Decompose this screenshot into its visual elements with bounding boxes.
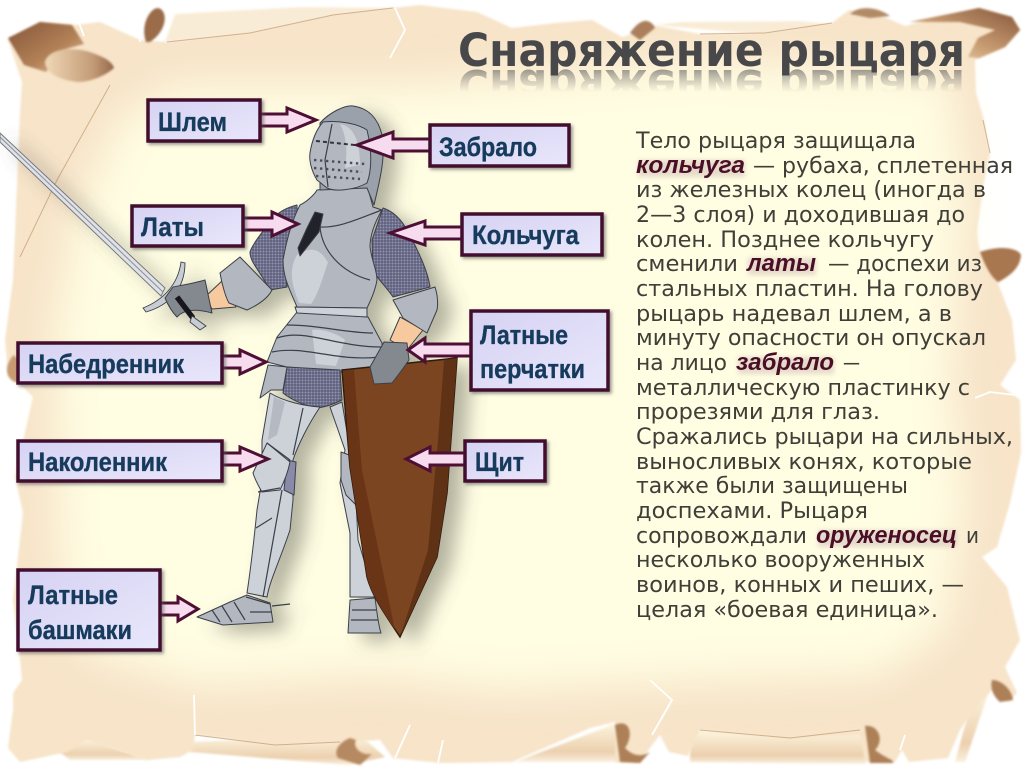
label: plate armour [132,206,243,246]
label: gauntlets: Латные [480,320,568,350]
label: visor: Забрало [439,132,537,162]
label: knee guard: Наколенник [28,447,167,477]
body text [635,128,1013,623]
body text: прорезями для глаз. [636,399,880,425]
body text: Тело рыцаря защищала [635,128,916,154]
curl: top left [8,8,165,82]
body text: также были защищены [636,473,908,499]
body text: и [966,523,979,549]
arrow: shield [406,447,466,471]
arrow: cuisse [220,350,266,374]
sword [0,133,185,312]
label: visor [430,125,569,166]
label: gauntlets [471,311,608,390]
body text: доспехами. Рыцаря [636,498,868,524]
body text: колен. Позднее кольчугу [636,227,934,253]
highlight glows [638,160,957,547]
body text: латы [746,250,816,277]
curl: right edge [980,248,1021,282]
label: knee guard [18,441,222,481]
label: plate armour: Латы [141,212,204,242]
arrow: mail [390,221,463,245]
body text: 2—3 слоя) и доходившая до [636,202,965,228]
label: helmet [148,100,260,141]
arrow: boots [158,597,198,621]
body text: Сражались рыцари на сильных, [636,424,1013,450]
arrow: helmet [258,108,316,132]
arrow: visor [357,132,431,158]
body text: на лицо [636,350,727,376]
breastplate and gorget [283,185,382,308]
body text: — рубаха, сплетенная [753,153,1013,179]
left tasset flap [260,365,287,398]
body text: оруженосец [816,522,957,549]
label: helmet: Шлем [158,107,227,137]
title text: Снаряжение рыцаря [458,24,965,77]
label: gauntlets: перчатки [480,354,585,384]
reflection of title: Снаряжение рыцаря [458,59,965,112]
right glove [370,342,409,384]
body text: сопровождали [636,523,807,549]
label: chain mail [462,214,602,255]
shield [342,358,457,637]
body text: — [843,350,860,376]
body text: стальных пластин. На голову [636,276,983,302]
body text: минуту опасности он опускал [636,325,986,351]
body text: целая «боевая единица». [636,597,938,623]
body text: рыцарь надевал шлем, а в [636,301,952,327]
label: shield [465,441,545,481]
label: cuisse [18,343,222,383]
tassets [267,307,382,372]
grip and pommel [177,297,193,318]
label: cuisse: Набедренник [28,349,184,379]
body text: воинов, конных и пеших, — [636,572,964,598]
title with reflection [458,24,965,112]
arrow: plate [241,212,298,236]
bottom rolls [336,680,1013,765]
body text: — доспехи из [828,251,982,277]
helmet [310,106,383,205]
right arm [390,287,438,350]
body text: несколько вооруженных [636,547,925,573]
left leg [197,393,320,625]
body text: кольчуга [636,152,745,179]
body text: забрало [736,349,834,376]
arrow: gloves [408,338,472,362]
label: boots: башмаки [28,615,132,645]
body text: выносливых конях, которые [636,449,972,475]
label: shield: Щит [475,447,524,477]
label: chain mail: Кольчуга [472,220,580,250]
body text: из железных колец (иногда в [636,177,986,203]
body text: металлическую пластинку с [636,375,970,401]
pale centre of the sheet [55,62,965,690]
callout arrows [158,108,472,621]
label: boots: Латные [28,580,118,610]
mail skirt [283,367,342,408]
right leg behind shield [330,402,381,633]
mail sleeves [250,205,430,297]
label: boots [18,570,160,650]
body text: сменили [636,251,738,277]
curl: top right [630,8,1020,58]
arrow: knee [220,447,268,471]
left arm and glove [165,257,272,330]
curl: left edge [7,355,38,382]
knight figure [0,106,457,637]
